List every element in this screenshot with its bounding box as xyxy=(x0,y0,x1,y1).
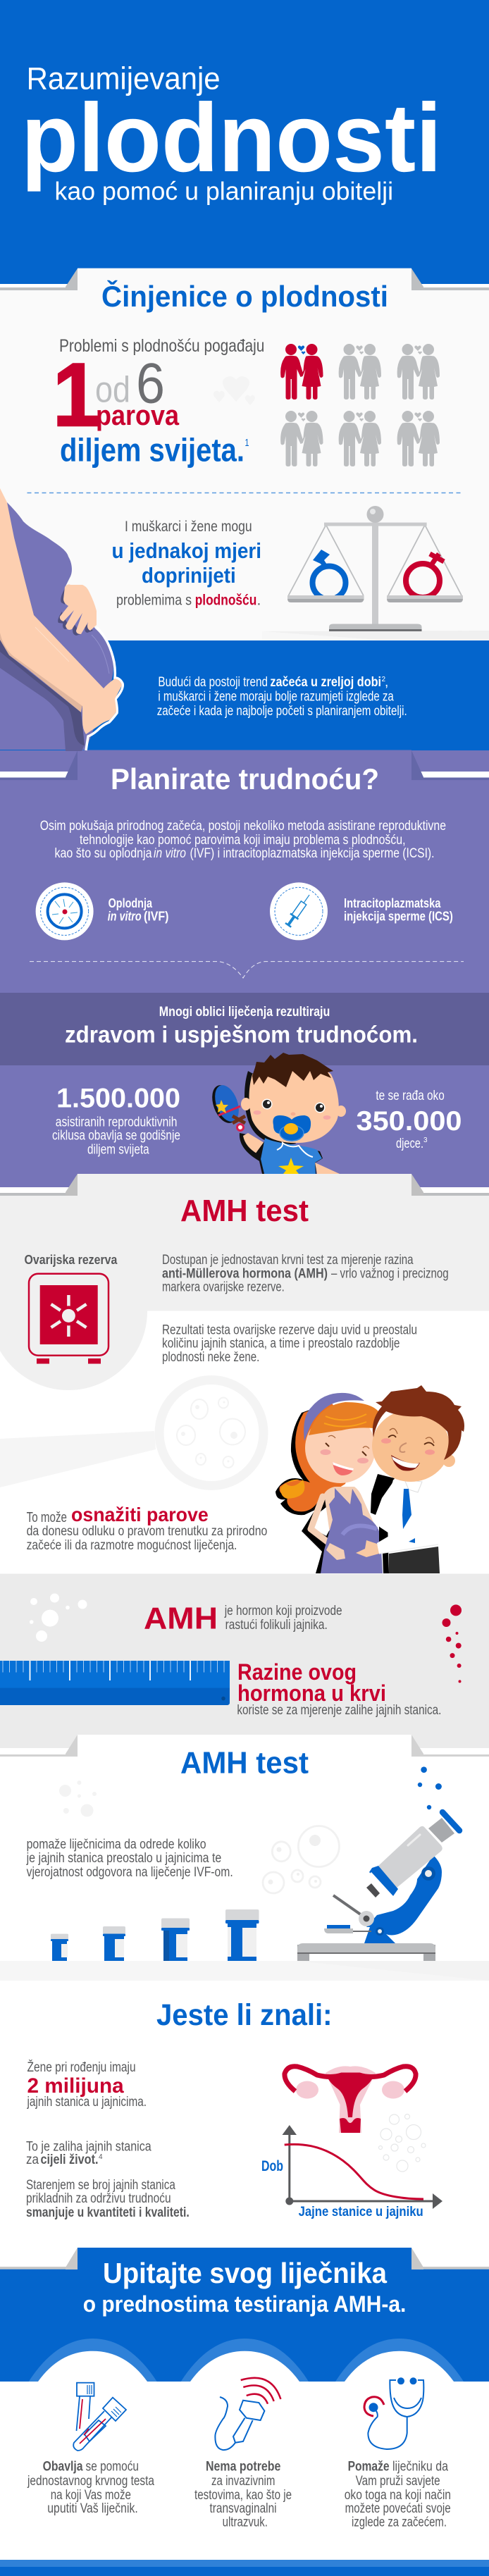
statistic: 350.000 children: 350.000 xyxy=(357,1106,462,1137)
text block: assisted reproduction intro: tehnologije kao pomoć parovima koji imaju problema s plodnošću, xyxy=(80,833,406,848)
icon: red dots xyxy=(442,1604,462,1683)
icon: rattle xyxy=(207,1082,245,1130)
text block: assisted reproduction intro: in vitro xyxy=(154,846,186,861)
icon: uterus xyxy=(285,2066,416,2133)
bottle 2 xyxy=(103,1926,125,1961)
text column: doctor's advice: oko toga na koji način xyxy=(345,2488,451,2503)
text block: test results: plodnosti neke žene. xyxy=(162,1350,259,1365)
chart: egg count declining with age: Jajne stanice u jajniku xyxy=(299,2205,423,2219)
panel: AMH hormone explanation: AMH xyxy=(144,1601,218,1635)
text block: conceiving at an older age: , xyxy=(385,675,388,690)
text block: test results: količinu jajnih stanica, a time i preostalo razdoblje xyxy=(162,1336,400,1351)
text block: AMH test helps doctors: pomaže liječnicima da odrede koliko xyxy=(27,1838,206,1852)
heading ribbon: Planirate trudnoću?: Planirate trudnoću? xyxy=(111,762,379,795)
icon grid: six couples, one highlighted xyxy=(280,344,440,466)
text block: assisted reproduction intro: kao što su oplodnja xyxy=(55,846,152,861)
label: IVF: Oplodnja xyxy=(109,896,153,910)
text column: no invasive tests: transvaginalni xyxy=(210,2501,277,2516)
illustration: pregnant woman xyxy=(0,488,123,751)
text block: 2 million eggs: jajnih stanica u jajnicima. xyxy=(27,2095,147,2110)
text block: AMH blood test xyxy=(162,1253,449,1295)
bottle 3 xyxy=(161,1918,190,1961)
text block: AMH blood test: – vrlo važnog i preciznog xyxy=(331,1266,449,1281)
heading ribbon: Činjenice o plodnosti xyxy=(0,268,489,313)
panel: AMH hormone explanation: je hormon koji proizvode xyxy=(224,1604,342,1618)
icon: faint dots xyxy=(59,1781,97,1816)
panel: ovarian reserve safe xyxy=(0,1232,147,1390)
icon: faint egg cells near chart xyxy=(379,2114,426,2172)
heading ribbon: Planirate trudnoću? xyxy=(0,750,489,795)
text block: conceiving at an older age: i muškarci i žene moraju bolje razumjeti izglede za xyxy=(158,690,394,705)
title: kao pomoć u planiranju obitelji xyxy=(55,176,393,205)
text block: men and women contribute equally xyxy=(111,519,261,609)
label: IVF: (IVF) xyxy=(144,909,169,923)
text block: quantity and quality decline: Starenjem se broj jajnih stanica xyxy=(26,2178,175,2193)
heading ribbon: ask your doctor: Upitajte svog liječnika xyxy=(103,2257,388,2289)
text block: hormone levels in blood: koriste se za mjerenje zalihe jajnih stanica. xyxy=(237,1703,441,1718)
icon: male symbol xyxy=(313,550,345,599)
text column: simple blood test: jednostavnog krvnog testa xyxy=(27,2474,154,2489)
text block: lifetime supply xyxy=(26,2139,151,2167)
text block: conceiving at an older age: Budući da postoji trend xyxy=(158,675,268,690)
icon: balance scales with gender symbols xyxy=(262,506,489,640)
text block: empower couples: začeće ili da razmotre mogućnost liječenja. xyxy=(27,1538,237,1553)
text column: doctor's advice: možete povećati svoje xyxy=(345,2501,451,2516)
text block: test results xyxy=(162,1323,417,1365)
text block: lifetime supply: 4 xyxy=(99,2153,103,2161)
text block: 2 million eggs: 2 milijuna xyxy=(27,2074,124,2098)
text column: doctor's advice: izglede za začećem. xyxy=(352,2515,447,2530)
illustration: baby with rattle and pacifier xyxy=(207,1053,346,1174)
text column: simple blood test: Obavlja xyxy=(43,2460,83,2475)
text column: no invasive tests: ultrazvuk. xyxy=(223,2515,268,2530)
figure: woman xyxy=(276,1393,383,1573)
text block: AMH test helps doctors: vjerojatnost odgovora na liječenje IVF-om. xyxy=(27,1865,233,1880)
text block: assisted reproduction intro: (IVF) i intracitoplazmatska injekcija sperme (ICSI). xyxy=(190,846,434,861)
heading ribbon: AMH test (blue) xyxy=(0,1735,489,1781)
text block: assisted reproduction intro xyxy=(40,819,446,861)
text block: lifetime supply: cijeli život. xyxy=(41,2153,99,2167)
text block: lifetime supply: za xyxy=(26,2153,39,2167)
text column: no invasive tests: za invazivnim xyxy=(211,2474,275,2489)
icon: pacifier xyxy=(273,1115,311,1141)
icon: female symbol xyxy=(406,554,444,597)
text block: empower couples: da donesu odluku o pravom trenutku za prirodno xyxy=(27,1524,267,1539)
icon: IVF egg with sperm xyxy=(36,882,94,940)
statistic: 1.500.000 cycles: 1.500.000 xyxy=(56,1084,180,1114)
bottle 1 xyxy=(51,1934,68,1961)
text column: simple blood test: se pomoću xyxy=(86,2460,139,2475)
text block: men and women contribute equally: plodnošću xyxy=(195,593,256,609)
icon: faint magnifier with egg cells xyxy=(0,1380,264,1487)
text column: doctor's advice xyxy=(345,2460,451,2530)
arches xyxy=(29,2339,464,2382)
band: healthy and successful pregnancy: zdravom i uspješnom trudnoćom. xyxy=(65,1021,418,1047)
band: healthy and successful pregnancy: Mnogi oblici liječenja rezultiraju xyxy=(159,1005,330,1020)
bottle 4 xyxy=(225,1909,259,1961)
panel: 1 in 6 couples statistic: 1 xyxy=(245,437,249,449)
illustration: happy expectant couple xyxy=(276,1385,464,1573)
text block: conceiving at an older age xyxy=(157,675,407,719)
text column: simple blood test xyxy=(27,2460,154,2516)
figure: man xyxy=(356,1385,464,1573)
icon: blue bubbles xyxy=(418,1766,442,1809)
text column: no invasive tests: Nema potrebe xyxy=(206,2460,280,2475)
text block: conceiving at an older age: začeće i kada je najbolje početi s planiranjem obitelji. xyxy=(157,704,407,719)
text block: hormone levels in blood: Razine ovog xyxy=(237,1659,357,1685)
chart: egg count declining with age xyxy=(261,2125,442,2219)
icon: microscope xyxy=(297,1812,459,1961)
text block: AMH test helps doctors xyxy=(26,1838,233,1880)
title: plodnosti xyxy=(21,84,442,192)
icon: stethoscope xyxy=(364,2378,423,2449)
label: IVF xyxy=(108,896,169,923)
text block: 2 million eggs: Žene pri rođenju imaju xyxy=(27,2060,136,2075)
label: IVF: in vitro xyxy=(108,909,142,923)
statistic: 1.500.000 cycles: asistiranih reproduktivnih xyxy=(56,1115,177,1129)
text column: doctor's advice: Pomaže xyxy=(348,2460,390,2475)
text block: hormone levels in blood xyxy=(237,1659,441,1718)
heading ribbon: Činjenice o plodnosti: Činjenice o plodnosti xyxy=(101,279,388,313)
text block: AMH blood test: Dostupan je jednostavan krvni test za mjerenje razina xyxy=(162,1253,414,1268)
icon: faint egg cells xyxy=(263,1826,339,1893)
icon: white dots xyxy=(30,1594,87,1642)
text column: no invasive tests: testovima, kao što je xyxy=(194,2488,292,2503)
statistic: 1.500.000 cycles: ciklusa obavlja se godišnje xyxy=(52,1129,180,1143)
text block: empower couples: osnažiti parove xyxy=(71,1504,209,1525)
text block: AMH blood test: markera ovarijske rezerve. xyxy=(162,1280,285,1295)
icon: ICSI syringe xyxy=(270,882,328,940)
text block: empower couples xyxy=(27,1504,267,1553)
title: Razumijevanje xyxy=(27,62,221,97)
panel: 1 in 6 couples statistic: Problemi s plodnošću pogađaju xyxy=(59,336,264,356)
label: ICSI: injekcija sperme (ICS) xyxy=(344,909,453,923)
heading ribbon: AMH test (red): AMH test xyxy=(180,1194,309,1228)
panel: AMH hormone explanation: rastući folikuli jajnika. xyxy=(225,1618,328,1633)
text block: conceiving at an older age: 2 xyxy=(382,676,386,683)
panel: 1 in 6 couples statistic: od xyxy=(95,369,130,410)
panel: 1 in 6 couples statistic xyxy=(53,336,264,469)
text column: doctor's advice: liječniku da xyxy=(392,2460,448,2475)
text block: test results: Rezultati testa ovarijske rezerve daju uvid u preostalu xyxy=(162,1323,417,1337)
heading ribbon: AMH test (blue): AMH test xyxy=(180,1746,309,1781)
icon: blood test tubes xyxy=(73,2383,126,2451)
text block: quantity and quality decline: smanjuje u kvantiteti i kvaliteti. xyxy=(26,2205,190,2220)
panel: 1 in 6 couples statistic: diljem svijeta. xyxy=(60,432,244,469)
panel: 1 in 6 couples statistic: parova xyxy=(96,400,180,431)
statistic: 1.500.000 cycles xyxy=(52,1084,180,1157)
text column: doctor's advice: Vam pruži savjete xyxy=(356,2474,440,2489)
panel: 1 in 6 couples statistic: 1 xyxy=(53,345,99,445)
text block: hormone levels in blood: hormona u krvi xyxy=(237,1680,386,1706)
label: ICSI: Intracitoplazmatska xyxy=(344,896,441,910)
icon: ultrasound probe xyxy=(215,2378,280,2450)
text block: AMH blood test: anti-Müllerova hormona (AMH) xyxy=(162,1266,328,1281)
icon: faint hearts xyxy=(213,376,255,405)
text block: men and women contribute equally: u jednakoj mjeri xyxy=(111,538,261,563)
text column: no invasive tests xyxy=(194,2460,292,2530)
icon: blue ruler xyxy=(0,1661,230,1705)
chart: four growing sample bottles xyxy=(51,1909,259,1961)
text block: men and women contribute equally: . xyxy=(256,593,261,609)
statistic: 350.000 children xyxy=(357,1089,462,1151)
text block: lifetime supply: To je zaliha jajnih stanica xyxy=(26,2139,151,2154)
heading: Jeste li znali: Jeste li znali: xyxy=(156,1998,333,2032)
text block: 2 million eggs xyxy=(27,2060,147,2110)
text column: simple blood test: na koji Vas može xyxy=(51,2488,131,2503)
chart: egg count declining with age: Dob xyxy=(261,2158,283,2174)
heading ribbon: ask your doctor: o prednostima testiranja AMH-a. xyxy=(83,2291,406,2317)
text block: empower couples: To može xyxy=(27,1510,67,1525)
statistic: 350.000 children: te se rađa oko xyxy=(376,1089,445,1103)
statistic: 350.000 children: 3 xyxy=(423,1137,428,1144)
panel: ovarian reserve safe: Ovarijska rezerva xyxy=(24,1253,118,1267)
text block: men and women contribute equally: problemima s xyxy=(116,593,192,609)
text block: men and women contribute equally: I muškarci i žene mogu xyxy=(125,519,252,535)
text block: men and women contribute equally: doprinijeti xyxy=(142,563,236,588)
text block: quantity and quality decline: prikladnih za održivu trudnoću xyxy=(26,2191,171,2206)
panel: AMH hormone explanation xyxy=(30,1594,462,1683)
statistic: 350.000 children: djece. xyxy=(396,1137,423,1151)
band: healthy and successful pregnancy xyxy=(65,1005,418,1047)
heading ribbon: AMH test (red) xyxy=(0,1174,489,1228)
icon: safe xyxy=(29,1274,109,1364)
panel: 1 in 6 couples statistic: 6 xyxy=(136,352,165,416)
text block: quantity and quality decline xyxy=(26,2178,190,2220)
statistic: 1.500.000 cycles: diljem svijeta xyxy=(87,1143,149,1157)
heading ribbon: ask your doctor xyxy=(0,2248,489,2317)
label: ICSI xyxy=(344,896,453,923)
text block: AMH test helps doctors: je jajnih stanica preostalo u jajnicima te xyxy=(26,1851,221,1866)
text column: simple blood test: uputiti Vaš liječnik. xyxy=(47,2501,138,2516)
text block: conceiving at an older age: začeća u zreljoj dobi xyxy=(270,675,381,690)
